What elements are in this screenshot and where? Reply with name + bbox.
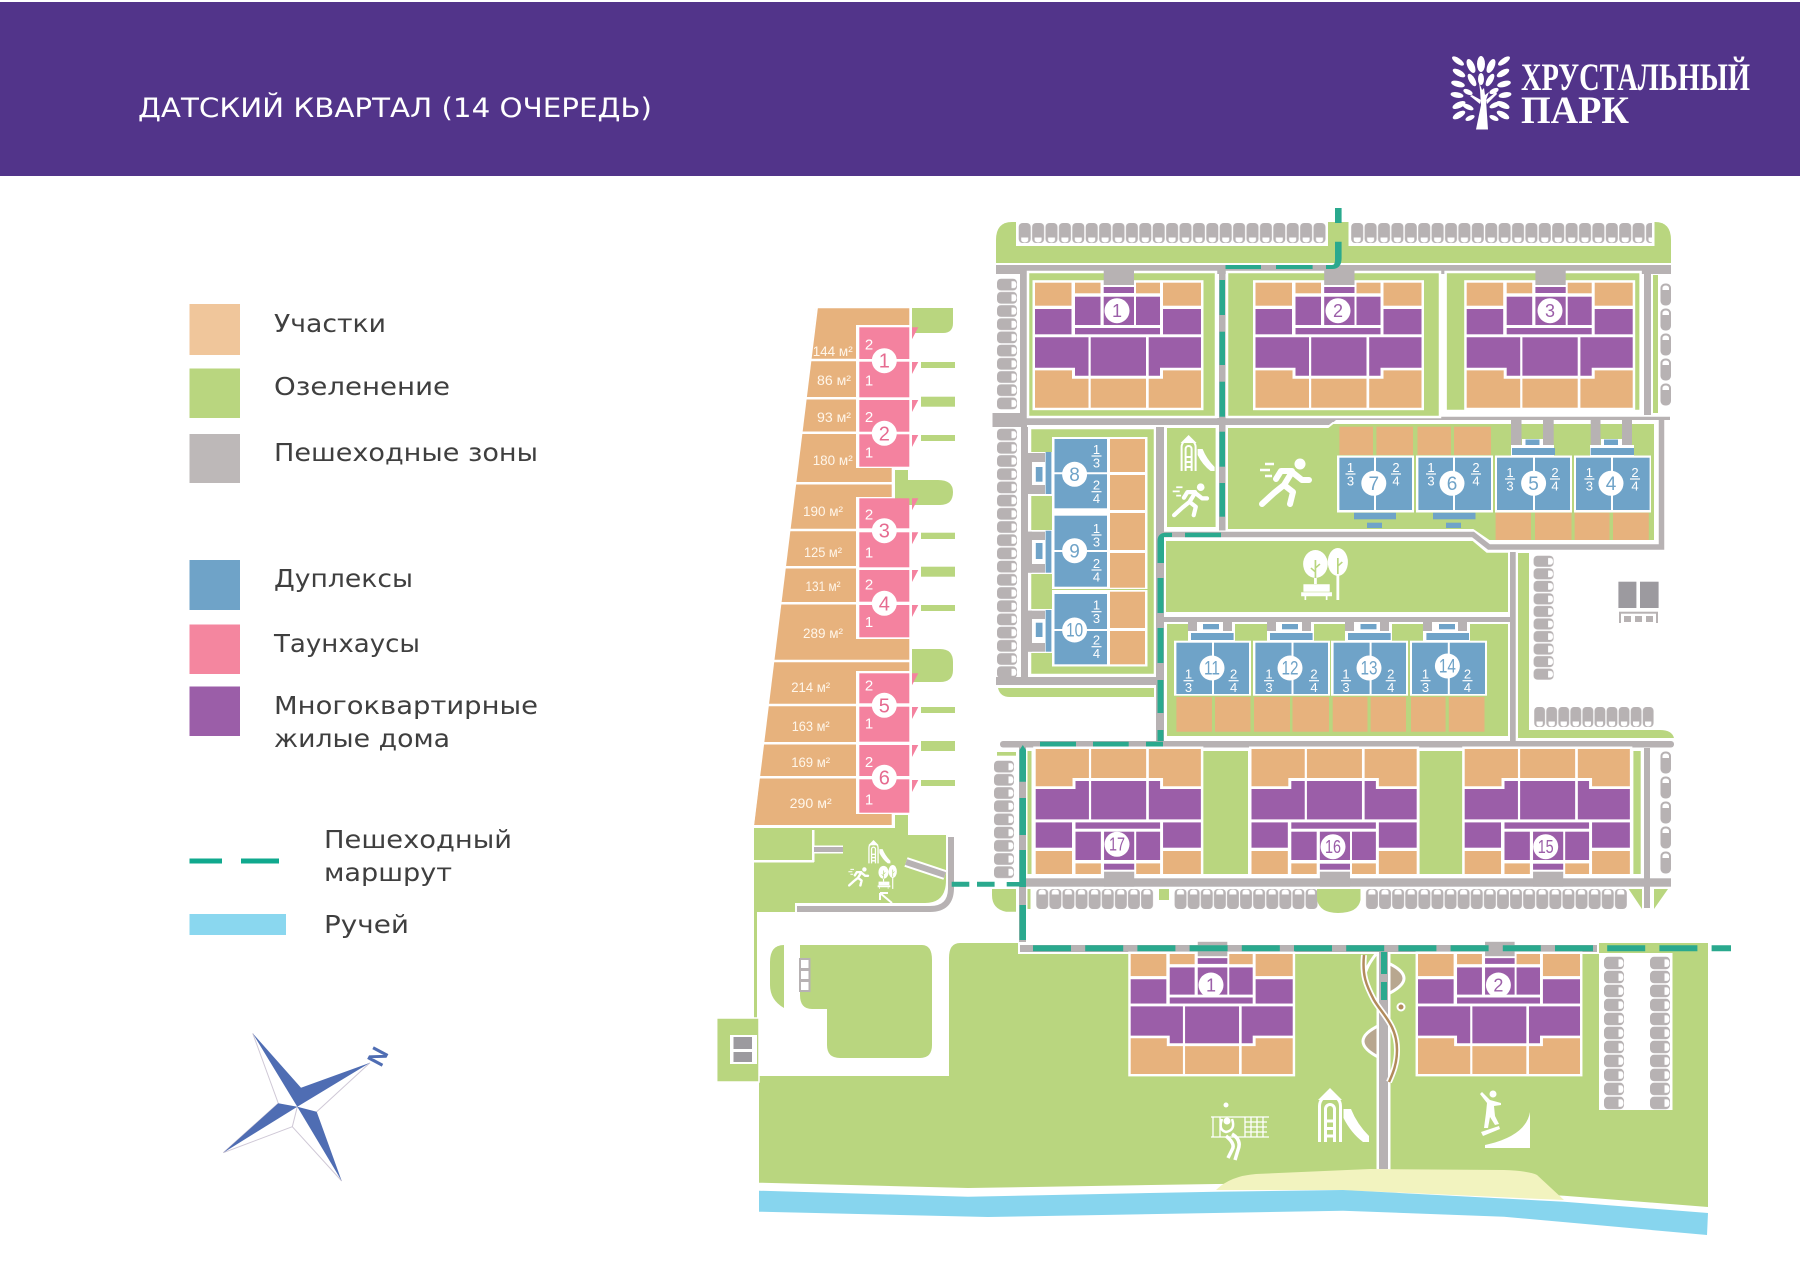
legend item: stream bbox=[190, 910, 409, 939]
pedestrian route upper bbox=[1158, 208, 1342, 747]
route dashes to block bbox=[952, 882, 998, 887]
title: ДАТСКИЙ КВАРТАЛ (14 ОЧЕРЕДЬ) bbox=[138, 92, 652, 124]
duplex 8 bbox=[1036, 437, 1148, 511]
duplex 4: 4 bbox=[1631, 478, 1639, 494]
south parking box bbox=[1599, 953, 1672, 1110]
roads around left duplex block bbox=[996, 427, 1164, 743]
duplex 10 bbox=[1036, 590, 1148, 666]
block 3 greenery bbox=[1446, 272, 1641, 411]
townhouses 5-6: 1 bbox=[865, 716, 873, 732]
townhouses 3-4 bbox=[859, 498, 918, 637]
townhouses 5-6: 1 bbox=[865, 792, 873, 808]
duplex 14: 3 bbox=[1422, 680, 1429, 695]
duplex 7: 4 bbox=[1392, 474, 1400, 488]
south parking 2 bbox=[1174, 889, 1318, 909]
compass bbox=[223, 1033, 394, 1181]
west parking lower bbox=[997, 428, 1017, 679]
legend item: duplexes bbox=[190, 560, 413, 610]
logo wordmark bbox=[1521, 55, 1750, 132]
duplex 10: 2 bbox=[1093, 633, 1100, 648]
duplex 8: 3 bbox=[1093, 456, 1100, 470]
south road bbox=[1024, 878, 1671, 887]
west entry stubs bbox=[1028, 452, 1052, 653]
townhouses 1-2 bbox=[859, 327, 918, 467]
duplex 13 bbox=[1331, 624, 1408, 696]
duplex 4 bbox=[1574, 440, 1651, 512]
plot areas: 214 м² bbox=[791, 679, 831, 695]
icon: slide bbox=[868, 840, 890, 863]
legend item: townhouses bbox=[190, 624, 420, 674]
block 1 greenery bbox=[1028, 272, 1216, 417]
parking row north-west bbox=[1016, 221, 1328, 246]
legend item: apartment buildings: жилые дома bbox=[274, 724, 450, 753]
duplex 8: 1 bbox=[1093, 442, 1100, 457]
east road upper bbox=[1644, 268, 1651, 415]
logo wordmark: ПАРК bbox=[1521, 89, 1629, 132]
duplex 12: 1 bbox=[1265, 667, 1273, 682]
green side strips bbox=[1028, 751, 1641, 874]
duplex 11 bbox=[1174, 624, 1251, 696]
duplex 10: 4 bbox=[1093, 646, 1100, 661]
top green band bbox=[996, 222, 1671, 263]
small green bit bbox=[997, 752, 1016, 756]
icon: runner bbox=[848, 867, 868, 885]
small utility column bbox=[799, 958, 810, 992]
townhouses 5-6: 2 bbox=[865, 678, 873, 694]
stream bbox=[759, 1190, 1708, 1235]
icon: volleyball bbox=[1211, 1102, 1269, 1160]
duplex 10: 3 bbox=[1093, 611, 1100, 626]
townhouses 3-4: 4 bbox=[879, 594, 890, 616]
building 1: 1 bbox=[1112, 301, 1122, 321]
south playground area bbox=[754, 815, 951, 1018]
duplex plots north row bbox=[1339, 427, 1649, 540]
plot areas: 290 м² bbox=[790, 795, 832, 811]
duplex 13: 4 bbox=[1387, 680, 1394, 695]
legend item: apartment buildings bbox=[190, 686, 538, 753]
utility building bbox=[1618, 582, 1659, 623]
duplex 14: 4 bbox=[1464, 680, 1471, 695]
road around duplex area bbox=[1160, 420, 1662, 547]
central road bbox=[1376, 952, 1390, 1170]
green left sliver bbox=[770, 945, 784, 1008]
townhouses 5-6: 2 bbox=[865, 754, 873, 771]
legend item: apartment buildings: Многоквартирные bbox=[274, 691, 538, 720]
duplex 14: 1 bbox=[1422, 667, 1429, 682]
sand bbox=[1216, 1169, 1564, 1200]
middle road bbox=[1000, 741, 1674, 748]
duplex 5: 1 bbox=[1506, 465, 1514, 480]
legend item: pedestrian route bbox=[190, 825, 512, 887]
townhouse plots bbox=[754, 308, 909, 825]
legend item: greenery bbox=[190, 368, 450, 418]
compass: N bbox=[362, 1043, 394, 1071]
west parking bbox=[994, 760, 1014, 879]
building south 2: 2 bbox=[1493, 976, 1503, 996]
duplex 6: 4 bbox=[1472, 474, 1480, 488]
legend item: pedestrian zones bbox=[190, 434, 538, 483]
duplex 14 bbox=[1410, 624, 1487, 696]
south parking 3 bbox=[1365, 889, 1627, 909]
duplex 6: 2 bbox=[1472, 460, 1480, 475]
path features bbox=[1363, 963, 1404, 1058]
duplex 6 bbox=[1416, 456, 1493, 528]
duplex 4-7 greenery bbox=[1227, 423, 1655, 541]
duplex row plots bbox=[1176, 697, 1484, 732]
duplex 10: 10 bbox=[1066, 620, 1083, 642]
west road bbox=[1019, 745, 1026, 951]
plot dividers bbox=[750, 360, 910, 777]
building 16: 16 bbox=[1325, 837, 1341, 857]
upper block bbox=[992, 208, 1674, 747]
legend item: pedestrian route: маршрут bbox=[324, 858, 452, 887]
parking south of utility bbox=[1534, 707, 1654, 727]
icon: trees and bench bbox=[878, 865, 897, 889]
plot left edge bbox=[753, 307, 817, 826]
duplex 5: 3 bbox=[1506, 478, 1514, 494]
duplex 7: 2 bbox=[1392, 460, 1400, 475]
townhouses 1-2: 2 bbox=[865, 409, 873, 426]
cross road bbox=[992, 413, 1670, 427]
icon: large runner bbox=[1260, 458, 1309, 504]
duplex 5 bbox=[1495, 440, 1572, 512]
road casing bbox=[1018, 942, 1599, 954]
west parking upper bbox=[997, 278, 1017, 410]
duplex 14: 2 bbox=[1464, 667, 1471, 682]
green strip under block bbox=[998, 688, 1154, 697]
duplex 6: 6 bbox=[1447, 474, 1457, 495]
legend item: plots: Участки bbox=[274, 309, 386, 338]
townhouses 1-2: 1 bbox=[879, 350, 890, 372]
duplex 7: 7 bbox=[1369, 474, 1379, 495]
plot areas: 180 м² bbox=[813, 452, 853, 468]
west utility block bbox=[717, 1018, 759, 1082]
park bbox=[1165, 540, 1509, 613]
south parking 1 bbox=[1036, 889, 1154, 909]
duplex 9 bbox=[1036, 511, 1148, 589]
duplex 9: 1 bbox=[1093, 521, 1100, 536]
icon: small runner bbox=[1173, 483, 1207, 515]
duplex 13: 3 bbox=[1342, 680, 1350, 695]
route on west road bbox=[1007, 745, 1026, 940]
plot areas: 169 м² bbox=[791, 754, 831, 770]
lower block bbox=[992, 741, 1674, 951]
legend item: townhouses: Таунхаусы bbox=[273, 629, 420, 658]
south road bbox=[1020, 945, 1597, 952]
duplex 13: 13 bbox=[1360, 658, 1378, 680]
green strip east of park bbox=[1518, 553, 1674, 738]
townhouses 3-4: 2 bbox=[865, 576, 873, 594]
legend item: duplexes: Дуплексы bbox=[274, 564, 413, 593]
townhouses 3-4: 1 bbox=[865, 614, 873, 631]
duplex 11: 1 bbox=[1185, 667, 1192, 682]
plot areas: 163 м² bbox=[792, 718, 830, 734]
townhouse greenery bbox=[895, 308, 955, 786]
duplex 9: 3 bbox=[1093, 534, 1100, 550]
central vertical road bbox=[1219, 274, 1226, 535]
duplex 11: 2 bbox=[1230, 667, 1237, 682]
townhouses 5-6: 5 bbox=[879, 696, 890, 718]
icon: slide bbox=[1318, 1088, 1369, 1142]
east road bbox=[1644, 748, 1650, 908]
duplex 4: 2 bbox=[1631, 465, 1639, 480]
building 17: 17 bbox=[1109, 834, 1125, 854]
duplex row greenery bbox=[1166, 623, 1509, 737]
plot areas bbox=[790, 343, 853, 811]
green patches south bbox=[992, 889, 1668, 913]
duplex 6: 1 bbox=[1427, 460, 1435, 475]
legend item: plots bbox=[190, 304, 386, 355]
parking row north-east bbox=[1348, 221, 1654, 246]
legend item: pedestrian route: Пешеходный bbox=[324, 825, 512, 854]
duplex 9: 4 bbox=[1093, 570, 1100, 584]
route arrow bbox=[880, 893, 892, 903]
townhouse section bbox=[750, 307, 998, 1018]
building 3: 3 bbox=[1545, 301, 1555, 321]
duplex 8: 2 bbox=[1093, 478, 1100, 493]
townhouses 1-2: 2 bbox=[865, 336, 873, 354]
green strip east bbox=[1653, 275, 1658, 413]
duplex 11: 3 bbox=[1185, 680, 1192, 695]
duplex 9: 9 bbox=[1069, 542, 1080, 562]
icon: trees and bench bbox=[1302, 548, 1348, 600]
driveways of duplexes 4 and 5 bbox=[1511, 420, 1634, 457]
duplex 13: 1 bbox=[1342, 667, 1350, 682]
building 2 bbox=[1253, 270, 1424, 410]
townhouses 3-4: 2 bbox=[865, 506, 873, 524]
building 16 bbox=[1249, 746, 1419, 887]
duplex 11: 4 bbox=[1230, 680, 1237, 695]
building south 2 bbox=[1416, 942, 1582, 1076]
legend item: greenery: Озеленение bbox=[274, 372, 450, 401]
duplex 4: 3 bbox=[1586, 478, 1593, 494]
duplex 6: 3 bbox=[1427, 474, 1435, 488]
road north of duplex row bbox=[1164, 617, 1510, 622]
duplex 8: 8 bbox=[1069, 465, 1080, 486]
logo bbox=[1450, 55, 1750, 132]
duplex 7 bbox=[1337, 456, 1414, 528]
east parking upper bbox=[1660, 282, 1671, 407]
duplex 5: 4 bbox=[1551, 478, 1559, 494]
block 2 greenery bbox=[1227, 272, 1440, 417]
townhouses 5-6: 6 bbox=[879, 768, 890, 790]
townhouses 1-2: 2 bbox=[879, 424, 890, 446]
east parking bbox=[1660, 750, 1671, 875]
parking east of park bbox=[1534, 555, 1554, 680]
duplex 11: 11 bbox=[1204, 658, 1220, 680]
main north road bbox=[996, 265, 1671, 274]
plot areas: 289 м² bbox=[803, 625, 843, 641]
south quarter bbox=[717, 942, 1731, 1235]
site plan bbox=[717, 208, 1731, 1235]
legend item: stream: Ручей bbox=[324, 910, 409, 939]
plot areas: 131 м² bbox=[806, 578, 841, 594]
duplex 9: 2 bbox=[1093, 556, 1100, 571]
townhouses 3-4: 1 bbox=[865, 544, 873, 562]
building 1 bbox=[1032, 270, 1204, 410]
townhouses 5-6 bbox=[859, 673, 918, 813]
plot areas: 86 м² bbox=[817, 372, 851, 388]
duplex 4: 1 bbox=[1586, 465, 1593, 480]
plot areas: 93 м² bbox=[817, 409, 851, 425]
lawn bbox=[759, 943, 1708, 1207]
building 3 bbox=[1464, 270, 1635, 410]
plot areas: 190 м² bbox=[803, 503, 843, 519]
building 2: 2 bbox=[1333, 301, 1343, 321]
building 15 bbox=[1462, 746, 1632, 887]
duplex row entry stubs bbox=[1188, 622, 1470, 641]
townhouses 1-2: 1 bbox=[865, 372, 873, 390]
building 15: 15 bbox=[1538, 837, 1554, 857]
duplex 12: 12 bbox=[1282, 658, 1298, 680]
road east of park bbox=[1510, 552, 1516, 741]
duplex 12: 4 bbox=[1310, 680, 1318, 695]
duplex 7: 3 bbox=[1347, 474, 1354, 488]
duplex 4: 4 bbox=[1606, 474, 1617, 495]
road to park with bend bbox=[1160, 420, 1662, 547]
duplex 12 bbox=[1253, 624, 1330, 696]
building 17 bbox=[1033, 746, 1203, 887]
route on middle road bbox=[1040, 742, 1163, 747]
playground panel bbox=[1166, 427, 1217, 528]
header band bbox=[0, 2, 1800, 176]
legend item: pedestrian zones: Пешеходные зоны bbox=[274, 438, 538, 467]
icon: playground slide bbox=[1181, 435, 1215, 471]
duplex 5: 5 bbox=[1528, 474, 1539, 495]
duplex 14: 14 bbox=[1439, 656, 1456, 678]
townhouses 1-2: 1 bbox=[865, 444, 873, 462]
winding path bbox=[1363, 954, 1397, 1082]
duplex 7: 1 bbox=[1347, 460, 1354, 475]
duplex 5: 2 bbox=[1551, 465, 1559, 480]
townhouses 3-4: 3 bbox=[879, 520, 890, 542]
plot areas: 125 м² bbox=[804, 544, 842, 560]
duplex 12: 3 bbox=[1265, 680, 1273, 695]
plot areas: 144 м² bbox=[813, 343, 853, 359]
logo tree icon bbox=[1450, 55, 1512, 129]
left duplex block greenery bbox=[1030, 428, 1155, 675]
building south 1: 1 bbox=[1206, 976, 1216, 996]
building south 1 bbox=[1128, 942, 1295, 1076]
left upper road bbox=[1020, 274, 1027, 420]
duplex 13: 2 bbox=[1387, 667, 1394, 682]
green inner block bbox=[800, 945, 932, 1058]
duplex 8: 4 bbox=[1093, 491, 1100, 506]
legend bbox=[190, 304, 538, 939]
icon: skater bbox=[1480, 1090, 1530, 1148]
route on south road bbox=[1033, 945, 1731, 951]
duplex 10: 1 bbox=[1093, 598, 1100, 613]
duplex 12: 2 bbox=[1310, 667, 1318, 682]
